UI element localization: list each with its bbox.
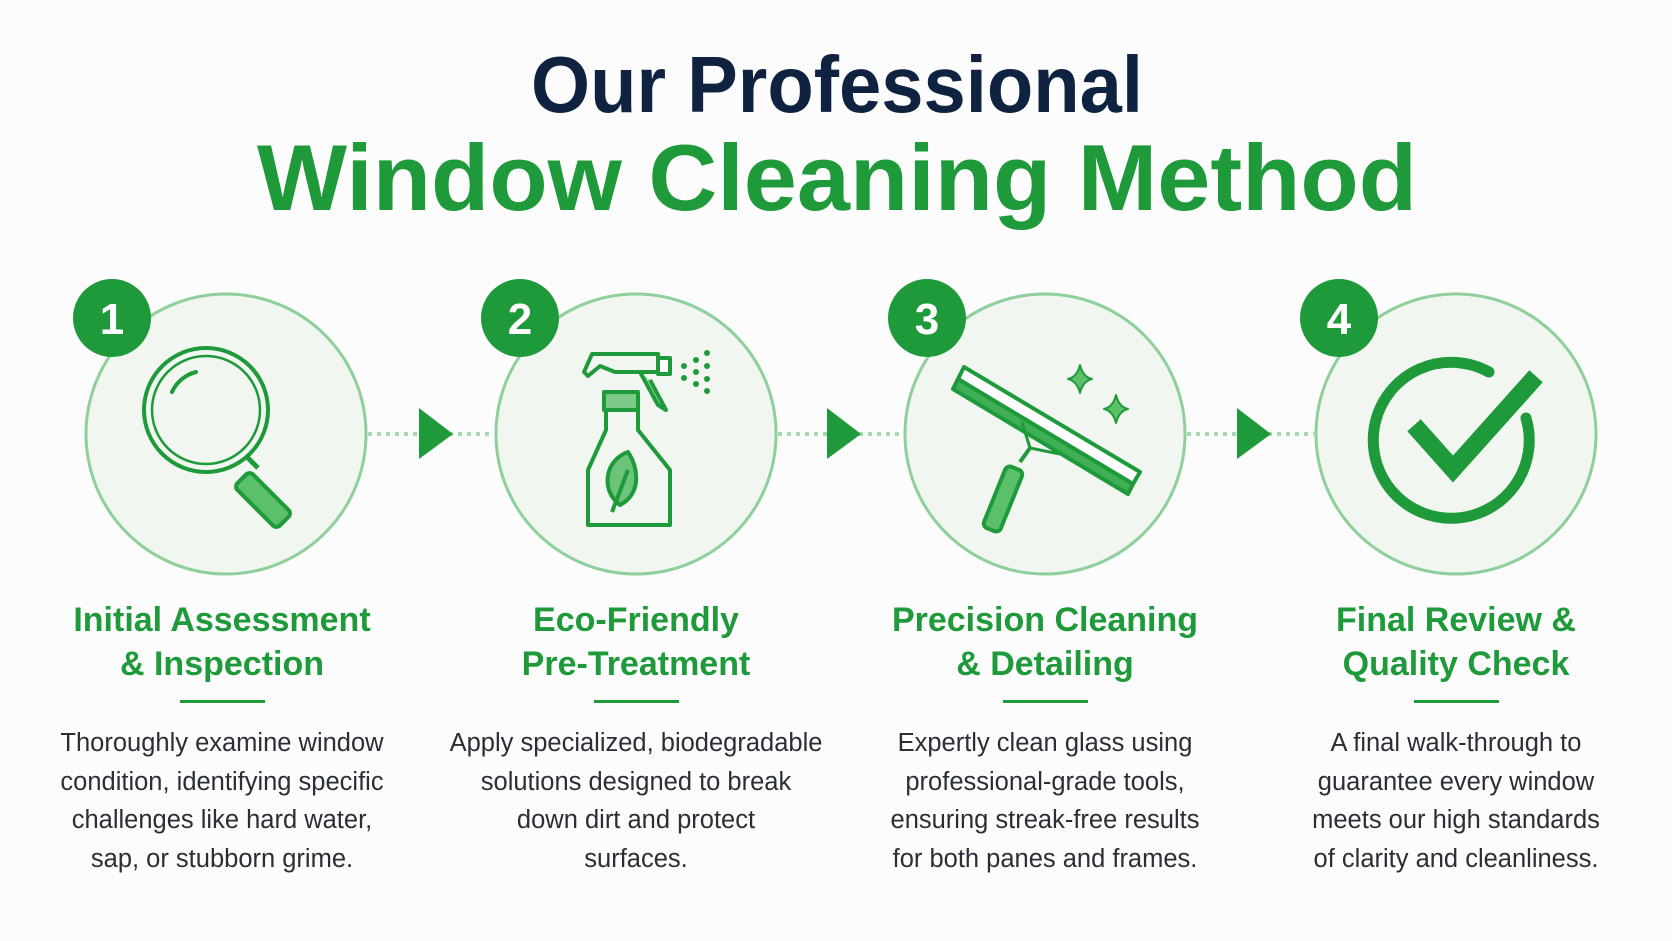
text: step 4 [1312, 601, 1600, 873]
text: step 1: challenges like hard water, [72, 806, 372, 834]
text: step 1: & Inspection [120, 645, 324, 683]
text: step 4: guarantee every window [1318, 768, 1595, 796]
text: step 4: of clarity and cleanliness. [1314, 845, 1598, 873]
text: step 4: Final Review & [1336, 601, 1576, 639]
arrow: 2 to 3 [778, 408, 904, 459]
text: step 2: surfaces. [584, 845, 688, 873]
title: Window Cleaning Method [257, 125, 1417, 230]
icon: squeegee [953, 365, 1140, 533]
text: step 3: for both panes and frames. [893, 845, 1197, 873]
arrow: 1 to 2 [368, 408, 494, 459]
text: step 3: & Detailing [956, 645, 1134, 683]
title [257, 40, 1417, 230]
badge 3 [888, 279, 966, 357]
text: step 4: meets our high standards [1312, 806, 1600, 834]
badge 4 [1300, 279, 1378, 357]
text: step 2: Pre-Treatment [522, 645, 750, 683]
badge 4: 4 [1327, 295, 1352, 344]
text: step 2: Eco-Friendly [533, 601, 739, 639]
text: step 2: Apply specialized, biodegradable [450, 729, 822, 757]
badge 2 [481, 279, 559, 357]
step 4 circle [1300, 279, 1596, 574]
arrow: 3 to 4 [1187, 408, 1314, 459]
step 3 circle [888, 279, 1185, 574]
text: step 4: A final walk-through to [1331, 729, 1581, 757]
step 2 circle [481, 279, 776, 574]
text: step 4: Quality Check [1343, 645, 1569, 683]
badge 3: 3 [915, 295, 939, 344]
badge 1 [73, 279, 151, 357]
text: step 1 [60, 601, 384, 873]
text: step 1: sap, or stubborn grime. [91, 845, 353, 873]
text: step 2: down dirt and protect [517, 806, 755, 834]
text: step 3: ensuring streak-free results [891, 806, 1199, 834]
icon: magnifier [144, 348, 292, 529]
icon: spray bottle [584, 350, 710, 525]
badge 2: 2 [508, 295, 532, 344]
text: step 3: Precision Cleaning [892, 601, 1198, 639]
text: step 1: Thoroughly examine window [60, 729, 384, 757]
icon: check circle [1373, 362, 1530, 518]
badge 1: 1 [100, 295, 124, 344]
step 1 circle [73, 279, 366, 574]
text: step 1: Initial Assessment [73, 601, 371, 639]
text: step 1: condition, identifying specific [60, 768, 384, 796]
title: Our Professional [531, 40, 1143, 129]
text: step 3: Expertly clean glass using [898, 729, 1192, 757]
text: step 2: solutions designed to break [481, 768, 791, 796]
text: step 3 [891, 601, 1199, 873]
text: step 3: professional-grade tools, [905, 768, 1185, 796]
text: step 2 [450, 601, 822, 873]
